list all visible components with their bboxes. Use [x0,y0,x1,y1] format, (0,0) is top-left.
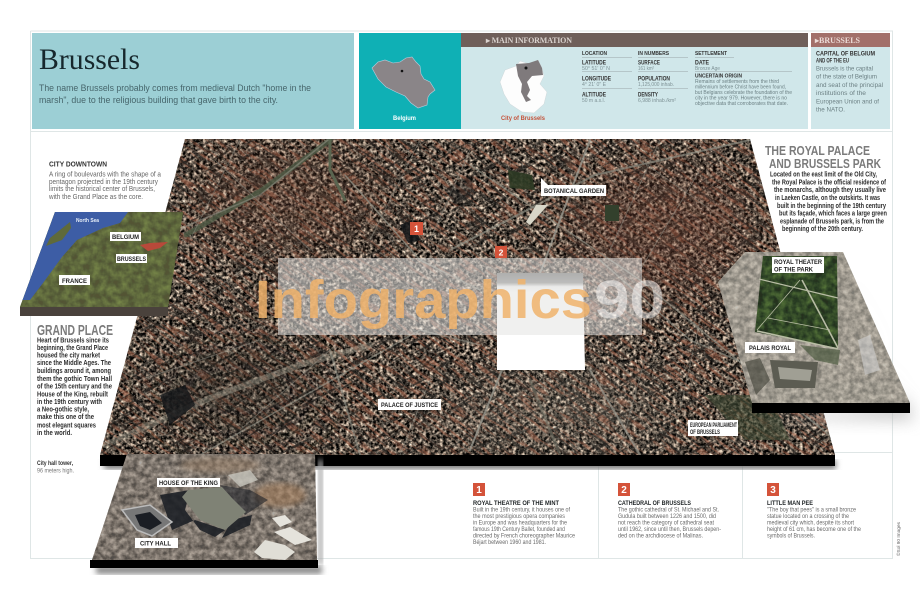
map base shadow [104,460,836,469]
label: House of the King: HOUSE OF THE KING [159,480,218,487]
column: in numbers: 6,988 inhab./km² [638,98,676,104]
orange roofs [254,483,306,507]
text block: Grand Place: them the gothic Town Hall [37,376,112,383]
watermark: Infographics [255,270,592,330]
label: Palace of Justice [378,399,441,410]
column: in numbers: SURFACE [638,60,660,66]
text block: Royal Palace and Brussels Park: Located on the east limit of the Old City, [770,172,877,178]
text block: Grand Place: of the 15th century and the [37,384,112,390]
icon: City of Brussels map [500,60,547,113]
header: Brussels: ▸BRUSSELS [814,36,861,45]
label: European Parliament: OF BRUSSELS [690,429,720,436]
text block: Grand Place: in the 19th century with [37,399,102,406]
inset: Royal Park and Palais Royal [718,252,915,420]
island of Britain [46,222,71,246]
callout 3: Little Man Pee: height of 61 cm, has become one of the [767,527,862,533]
note: city hall tower [37,461,74,474]
column: settlement: SETTLEMENT [695,51,728,57]
number badge 2: 2 [621,485,627,496]
text block: Grand Place: Heart of Brussels since its [37,338,109,344]
label: France: FRANCE [62,278,88,285]
column: location: LONGITUDE [582,76,611,82]
column: in numbers: IN NUMBERS [638,51,669,57]
text block: Royal Palace and Brussels Park: THE ROYAL PALACE [765,144,870,158]
callout 2: Cathedral of Brussels: not reach the category of cathedral seat [618,520,714,526]
body text: and seat of the principal [816,82,883,89]
column: settlement: Bronze Age [695,66,720,72]
label: Palais Royal [745,342,795,353]
Grand Place square [182,487,246,530]
callout 1: Royal Theatre of the Mint [473,483,576,546]
column: settlement: but Belgians celebrate the foundation of the [695,90,792,96]
marker 1: 1 [414,224,419,234]
subheading: CAPITAL OF BELGIUM [816,50,875,58]
watermark [255,258,665,335]
column: location [582,51,632,104]
City Hall block [122,505,172,536]
body text: Brussels is the capital [816,66,873,72]
callout 2: Cathedral of Brussels [618,483,721,540]
callout 1: Royal Theatre of the Mint: Built in the 19th century, it houses one of [473,508,570,514]
label: European Parliament [688,420,738,436]
column: location: LATITUDE [582,60,606,66]
column: settlement: city in the year 979. However, there is no [695,96,787,102]
label: European Parliament: EUROPEAN PARLIAMENT [690,422,737,429]
panel: aerial city map [100,139,836,469]
sea [22,212,128,300]
callout 1: Royal Theatre of the Mint: ROYAL THEATRE OF THE MINT [473,500,559,507]
text block: City Downtown: with the Grand Place as the core. [48,194,143,201]
intro text [39,83,311,105]
label: Royal Theater of the Park: OF THE PARK [774,266,813,274]
Palais Royal [770,360,818,388]
text block: Grand Place: make this one of the [37,414,94,421]
text block: City Downtown: limits the historical center of Brussels, [49,186,155,193]
column: settlement: UNCERTAIN ORIGIN [695,74,742,80]
callout 2: Cathedral of Brussels: ded on the archdiocese of Malinas. [618,534,703,540]
number badge 3: 3 [770,485,776,496]
callout 2: Cathedral of Brussels: CATHEDRAL OF BRUSSELS [618,500,692,507]
text block: Royal Palace and Brussels Park: in Laeken Castle, on the outskirts. It was [775,195,880,202]
watermark: 90 [594,270,665,330]
text block: Grand Place [37,322,113,437]
column: settlement: DATE [695,60,709,66]
column: in numbers: 161 km² [638,66,654,72]
label: City Hall [135,538,178,548]
number badge 1: 1 [476,485,482,496]
label: Belgium: BELGIUM [112,234,139,241]
text block: City Downtown: CITY DOWNTOWN [49,160,107,168]
body text: institutions of the [816,90,866,97]
panel: Brussels capital sidebar [811,33,890,129]
title: Brussels [39,43,140,76]
column: settlement [695,51,792,107]
white roofs [272,515,292,527]
panel: Belgium locator map [359,33,461,129]
callout 1: Royal Theatre of the Mint: in Europe and was headquarters for the [473,520,568,526]
callout 1: Royal Theatre of the Mint: the most prestigious opera companies [473,514,565,520]
body text [816,66,883,114]
column: settlement: Remains of settlements from the third [695,79,779,85]
column: in numbers [638,51,688,104]
text block: City Downtown: pentagon projected in the 19th century [49,179,158,186]
label: Palais Royal: PALAIS ROYAL [749,345,791,352]
text block: Royal Palace and Brussels Park: the Royal Palace is the official residence of [772,180,887,186]
callout 3: Little Man Pee: medieval city which, despite its short [767,520,854,526]
text block: Royal Palace and Brussels Park: beginning of the 20th century. [782,226,863,233]
body text: of the state of Belgium [816,74,877,80]
column: in numbers: 1,125,000 inhab. [638,82,674,88]
label: Belgium: Belgium [393,115,416,122]
callout 3: Little Man Pee: LITTLE MAN PEE [767,500,814,507]
park [755,256,838,348]
label: Royal Theater of the Park [772,257,824,274]
intro text: The name Brussels probably comes from medieval Dutch "home in the [39,83,311,93]
body text: the NATO. [816,106,845,114]
label: Botanical Garden: BOTANICAL GARDEN [544,188,604,195]
label: Royal Theater of the Park: ROYAL THEATER [774,259,822,266]
marker 2 [495,246,507,258]
icon: Belgium outline [372,57,435,108]
column: location: ALTITUDE [582,92,606,98]
inset: regional satellite map [10,212,183,316]
column: location: 50 m a.s.l. [582,98,605,104]
callout 1: Royal Theatre of the Mint: Béjart between 1960 and 1981. [473,540,546,546]
dark buildings and parks [705,395,790,440]
label: City of Brussels: City of Brussels [501,115,545,122]
text block: Royal Palace and Brussels Park: the monarchs, although they usually live [774,187,886,194]
body text: European Union and of [816,98,879,106]
label: House of the King [157,478,220,487]
shadows [160,490,225,537]
text block: Royal Palace and Brussels Park [765,144,887,233]
callout 3: Little Man Pee [767,483,862,540]
tonal zones [570,170,750,290]
map left edge backdrop shape: Grand Place cut-out [497,273,585,370]
label: Botanical Garden [541,178,606,196]
text block: Grand Place: beginning, the Grand Place [37,345,108,352]
callout 3: Little Man Pee: statue located on a crossing of the [767,514,850,520]
callout 2: Cathedral of Brussels: The gothic cathedral of St. Michael and St. [618,508,719,514]
text block: Grand Place: housed the city market [37,352,101,360]
boulevards [105,140,835,455]
text block: Grand Place: buildings around it, among [37,368,111,375]
note: city hall tower: City hall tower, [37,461,73,467]
text block: Royal Palace and Brussels Park: but its façade, which faces a large green [779,210,887,218]
label: North Sea: North Sea [76,218,100,224]
panel: title [32,33,354,129]
inset: House of the King and City Hall [90,454,323,574]
text block: Royal Palace and Brussels Park: AND BRUSSELS PARK [769,157,881,171]
subheading: AND OF THE EU [816,58,849,64]
text block: City Downtown [48,160,161,201]
header: main information [461,33,808,47]
park tree texture [755,256,838,349]
callout 3: Little Man Pee: "The boy that pees" is a small bronze [767,508,857,514]
column: settlement: millennium before Christ have been found, [695,84,786,90]
park paths [757,279,838,349]
column: settlement: objective data that corroborates that date. [695,101,788,107]
note: city hall tower: 96 meters high. [37,468,74,474]
text block: Grand Place: since the Middle Ages. The [37,360,111,367]
intro text: marsh", due to the religious building that gave birth to the city. [39,95,278,105]
text block: Grand Place: GRAND PLACE [37,322,113,339]
text block: City Downtown: A ring of boulevards with the shape of a [49,172,161,178]
column: location: 50° 51' 0" N [582,66,610,72]
callout 1: Royal Theatre of the Mint: directed by French choreographer Maurice [473,534,576,540]
text block: Royal Palace and Brussels Park: esplanade of Brussels park, is from the [780,218,884,226]
callout 2: Cathedral of Brussels: Gudula built between 1226 and 1500, did [618,514,716,520]
text block: Grand Place: House of the King, rebuilt [37,392,109,398]
Brussels region highlight [140,242,168,251]
label: Brussels [116,254,147,263]
text block: Royal Palace and Brussels Park: built in the beginning of the 19th century [777,203,886,210]
column: in numbers: DENSITY [638,92,658,98]
callout 1: Royal Theatre of the Mint: famous 19th Century Ballet, founded and [473,527,565,533]
credit: ©Sol 90 Images [895,521,901,556]
panel: main information [461,33,808,129]
subheading [816,50,875,64]
column: location: 4° 21' 0" E [582,82,606,88]
header: main information: ▸ MAIN INFORMATION [485,36,572,45]
callout 2: Cathedral of Brussels: until 1962, since until then, Brussels depen- [618,527,721,533]
marker 2: 2 [499,248,504,258]
label: Brussels: BRUSSELS [117,256,146,263]
column: location: LOCATION [582,51,607,57]
label: France [59,275,90,285]
text block: Grand Place: most elegant squares [37,422,96,430]
text block: Grand Place: in the world. [37,430,72,437]
text block: Grand Place: a Neo-gothic style, [37,406,89,414]
column: in numbers: POPULATION [638,76,670,82]
label: Palace of Justice: PALACE OF JUSTICE [381,402,439,409]
label: City Hall: CITY HALL [140,540,171,548]
marker 1 [410,222,423,235]
callout 3: Little Man Pee: symbols of Brussels. [767,534,815,540]
